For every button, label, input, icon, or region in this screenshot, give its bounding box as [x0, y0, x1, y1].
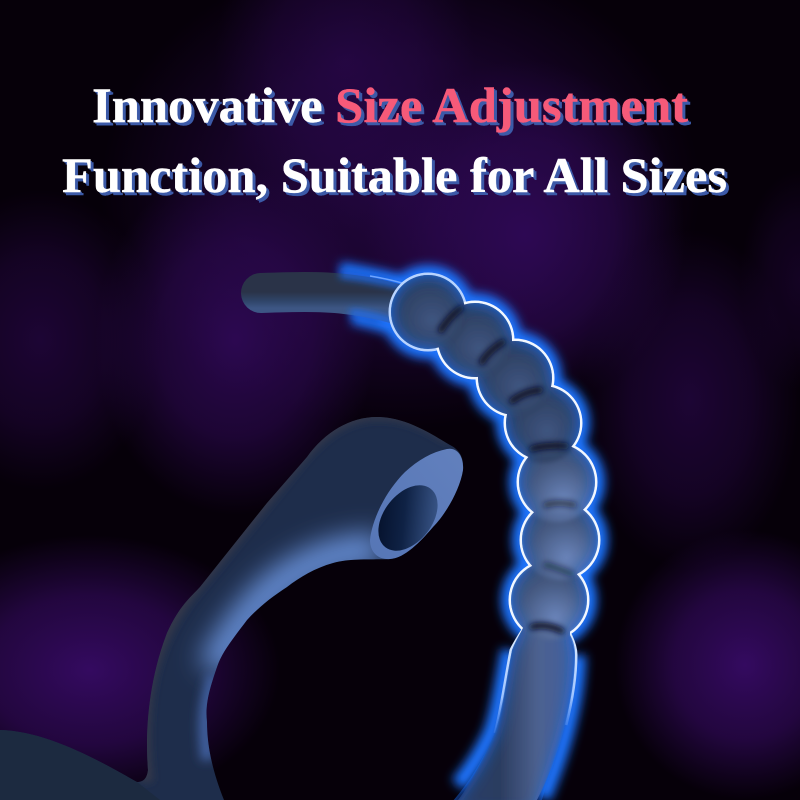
- arm outer edge shade: [144, 414, 450, 782]
- beads and stem fill: [388, 272, 600, 800]
- tail of strap: [261, 292, 410, 308]
- product: curved hook arm with opening: [0, 417, 464, 800]
- title line 2: Function, Suitable for All Sizes: [65, 150, 730, 206]
- title line 1: Innovative Size Adjustment: [92, 77, 688, 133]
- title: [62, 77, 730, 206]
- inner blue edge glow: [391, 275, 598, 800]
- title line 1: Innovative Size Adjustment: [95, 80, 691, 136]
- opening hole: [366, 474, 450, 562]
- title line 2: Function, Suitable for All Sizes: [62, 147, 727, 203]
- product: adjustable beaded strap: [261, 268, 600, 800]
- title line 1: Innovative Size Adjustment: [94, 78, 690, 134]
- arm highlight: [214, 550, 380, 670]
- base body: [0, 730, 160, 800]
- neon glow: [340, 268, 600, 798]
- creases between beads: [441, 308, 574, 631]
- neon outline: [391, 275, 598, 733]
- opening rim: [370, 449, 463, 559]
- title line 2: Function, Suitable for All Sizes: [64, 148, 728, 204]
- tail inner glow: [340, 274, 402, 323]
- tail highlight line: [370, 276, 402, 283]
